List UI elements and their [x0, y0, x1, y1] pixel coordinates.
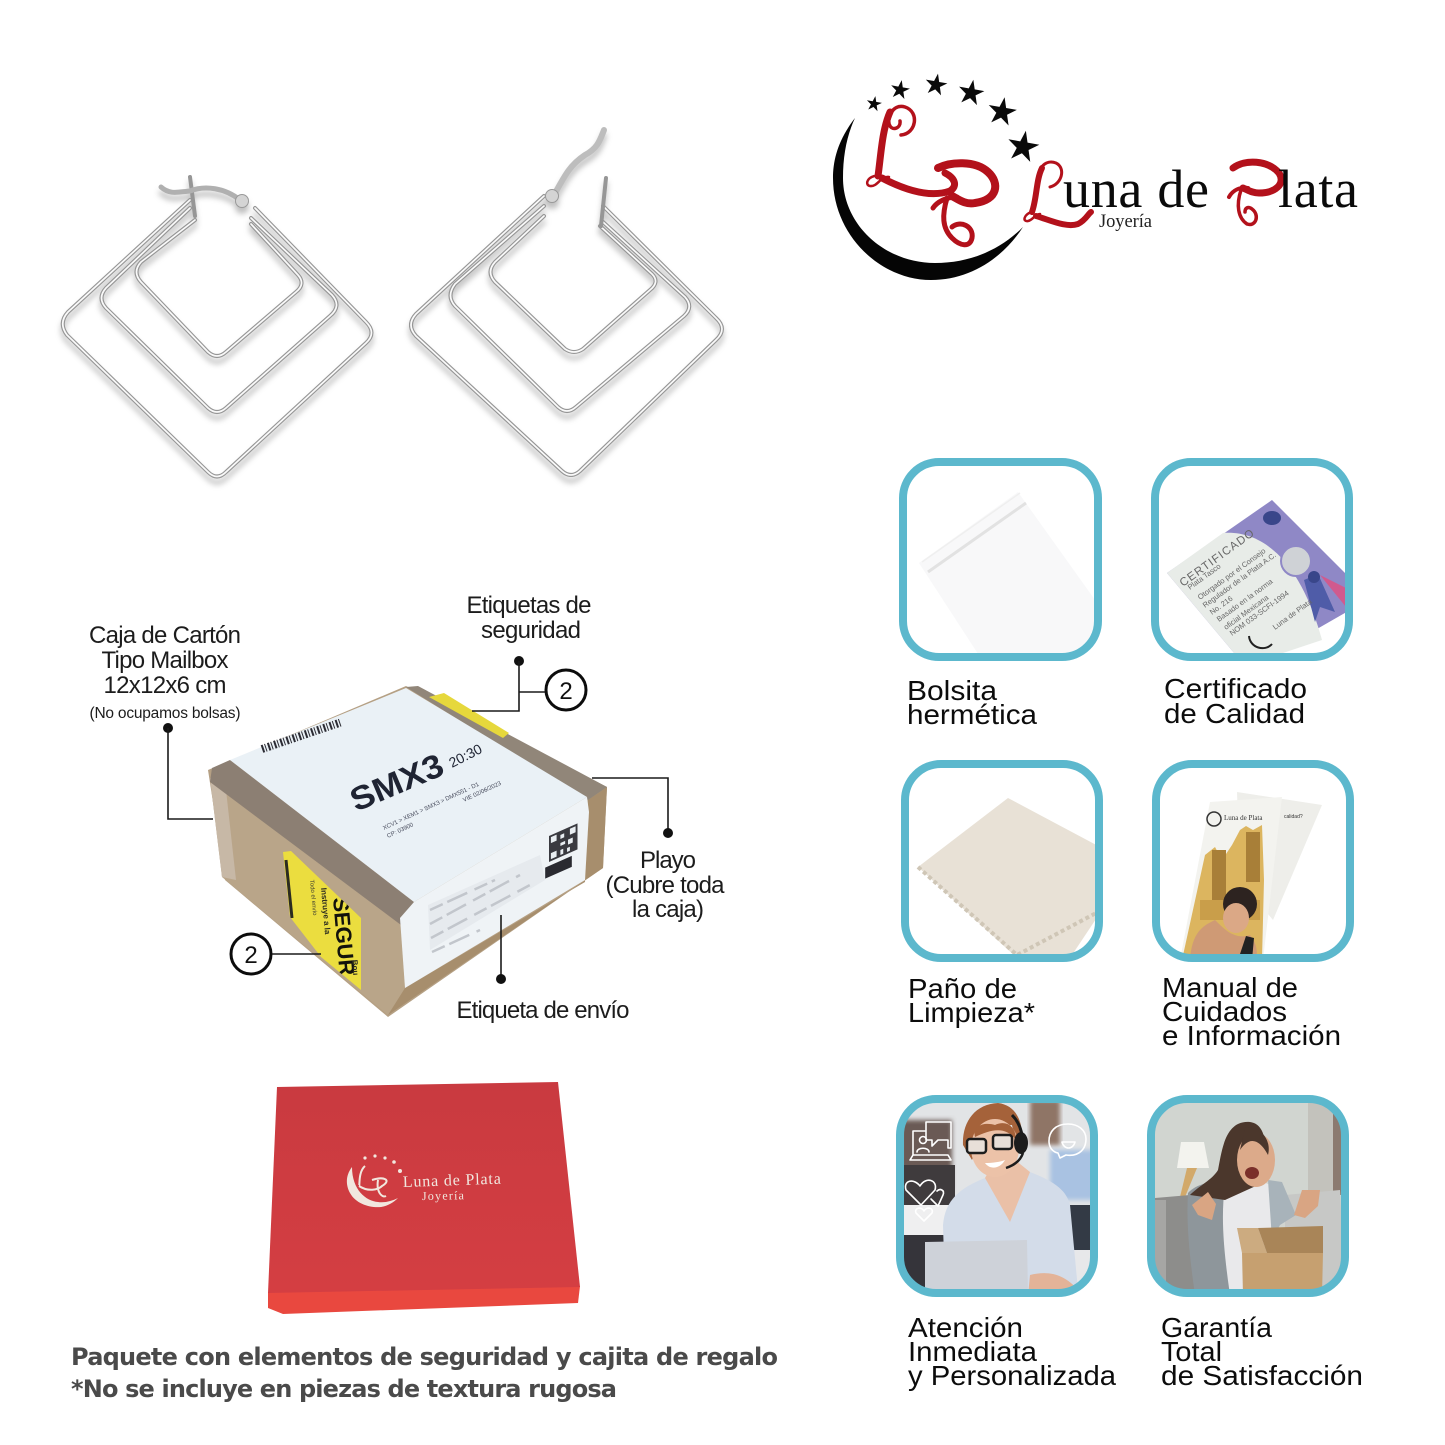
wordmark subtitle: Joyería [1099, 212, 1152, 232]
monogram LP [867, 106, 995, 245]
callout: security labels side: 2 [244, 942, 258, 969]
callout: cardboard box [89, 622, 241, 819]
red gift box [268, 1082, 580, 1314]
wordmark initial P [1229, 162, 1281, 224]
box side flange [268, 1286, 580, 1314]
frame [900, 1099, 1094, 1293]
callout: security labels top [466, 592, 592, 711]
icon: crescent moon [833, 118, 1023, 280]
photo: certificate: Regulador de la Plata A.C. [1201, 550, 1278, 610]
icon: stars [865, 72, 1041, 163]
box lid [268, 1082, 580, 1293]
caption: Paño de [908, 973, 1017, 1004]
callout: shipping label [456, 915, 630, 1024]
wrap band right [406, 686, 607, 800]
photo: support agent [900, 1100, 1095, 1296]
sticker warning text: SEGUR [328, 896, 360, 976]
route code: SMX3 [344, 746, 449, 818]
silver foil logo: Luna de Plata [403, 1171, 501, 1191]
photo: clear bag [922, 492, 1027, 574]
shipping box diagram [89, 592, 725, 1024]
panel: atención inmediata [900, 1099, 1116, 1391]
footnote [71, 1343, 778, 1403]
sticker warning text: Todo el envío [308, 880, 317, 916]
yellow security sticker top [429, 693, 509, 738]
photo: certificate: Plata Tasco [1186, 562, 1222, 592]
caption: Certificado [1164, 673, 1307, 704]
photo: brochures: calidad? [1284, 814, 1303, 820]
caption: Manual de [1162, 972, 1298, 1003]
caption: Bolsita [907, 675, 997, 706]
caption: y Personalizada [908, 1360, 1116, 1391]
sticker warning text [286, 860, 360, 976]
caption: Garantía [1161, 1312, 1272, 1343]
photo: certificate: No. 216 [1208, 594, 1234, 617]
left cardboard face [210, 778, 405, 1015]
wordmark initial L [1025, 162, 1091, 225]
photo: certificate: Luna de Plata [1271, 597, 1314, 632]
route details: CP: 03900 [386, 822, 415, 840]
panel: garantía total [1150, 1099, 1363, 1391]
box photo [208, 686, 607, 1017]
icon: hearts [905, 1180, 943, 1221]
frame [905, 764, 1099, 958]
silver foil logo: Joyería [422, 1188, 465, 1203]
logo: Luna de Plata [833, 72, 1358, 280]
photo: polishing cloth [918, 798, 1100, 958]
panel: manual de cuidados [1156, 764, 1350, 1051]
callout: security labels top: 2 [559, 678, 573, 705]
callout: cardboard box: Caja de Cartón [89, 622, 241, 649]
time: 20:30 [446, 740, 485, 771]
left earring [63, 177, 371, 476]
route details: XCV1 > XEM1 > SMX3 > DMX551 - D1 [382, 782, 481, 832]
photo: brochures: Luna de Plata [1224, 814, 1263, 822]
route details: VIE 02/06/2023 [462, 781, 503, 804]
sticker warning text: Instruye a la [319, 887, 332, 935]
photo: brochures [1180, 792, 1322, 960]
callout: security labels top: seguridad [481, 617, 581, 644]
callout: cardboard box: 12x12x6 cm [104, 672, 226, 699]
footnote: *No se incluye en piezas de textura rugosa [71, 1375, 617, 1403]
shipping address text [430, 875, 530, 952]
wordmark text: una de [1063, 159, 1209, 219]
photo: certificate: oficial Mexicana [1222, 592, 1271, 632]
caption: de Satisfacción [1161, 1360, 1363, 1391]
photo: certificate: Basado en la norma [1215, 576, 1275, 624]
wrap band left [210, 760, 414, 925]
photo: certificate [1167, 500, 1350, 660]
caption: hermética [907, 699, 1037, 730]
photo: certificate: NOM 033-SCFI-1994 [1228, 589, 1291, 638]
caption: Inmediata [908, 1336, 1037, 1367]
yellow security sticker side [283, 851, 361, 990]
earrings photo [63, 130, 722, 476]
callout: security labels top: Etiquetas de [466, 592, 592, 619]
shipping label top [230, 688, 587, 902]
icon: laptop chat [910, 1122, 951, 1160]
callout: wrap: la caja) [632, 896, 704, 923]
panel: bolsita hermética [903, 462, 1100, 730]
icon: smiling speech bubble [1049, 1124, 1086, 1158]
frame [1155, 462, 1349, 657]
panel: paño de limpieza [905, 764, 1100, 1028]
QR code [545, 823, 578, 879]
callout: wrap [592, 778, 725, 923]
caption: e Información [1162, 1020, 1341, 1051]
photo: certificate: CERTIFICADO [1178, 527, 1257, 589]
photo: certificate: Otorgado por el Consejo [1196, 546, 1267, 602]
caption: Atención [908, 1312, 1023, 1343]
caption: Cuidados [1162, 996, 1287, 1027]
caption: Total [1161, 1336, 1222, 1367]
callout: shipping label: Etiqueta de envío [456, 997, 630, 1024]
callout: cardboard box: (No ocupamos bolsas) [90, 705, 240, 722]
shipping label front [400, 797, 589, 988]
sticker warning text: Bou [350, 959, 360, 976]
caption: Limpieza* [908, 997, 1035, 1028]
callout: wrap: (Cubre toda [606, 872, 725, 899]
panel: certificado de calidad [1155, 462, 1350, 729]
route details [382, 781, 503, 840]
caption: de Calidad [1164, 698, 1305, 729]
frame [903, 462, 1098, 657]
photo: happy customer [1150, 1100, 1345, 1295]
right earring [411, 130, 722, 475]
silver foil logo [347, 1154, 501, 1207]
right cardboard face [388, 787, 607, 1015]
frame [1156, 764, 1350, 958]
barcode [262, 722, 342, 749]
footnote: Paquete con elementos de seguridad y cajita de regalo [71, 1343, 778, 1371]
wordmark text: lata [1278, 159, 1358, 219]
frame [1151, 1099, 1345, 1293]
callout: cardboard box: Tipo Mailbox [102, 647, 228, 674]
callout: wrap: Playo [640, 847, 696, 874]
callout: security labels side [231, 934, 321, 974]
